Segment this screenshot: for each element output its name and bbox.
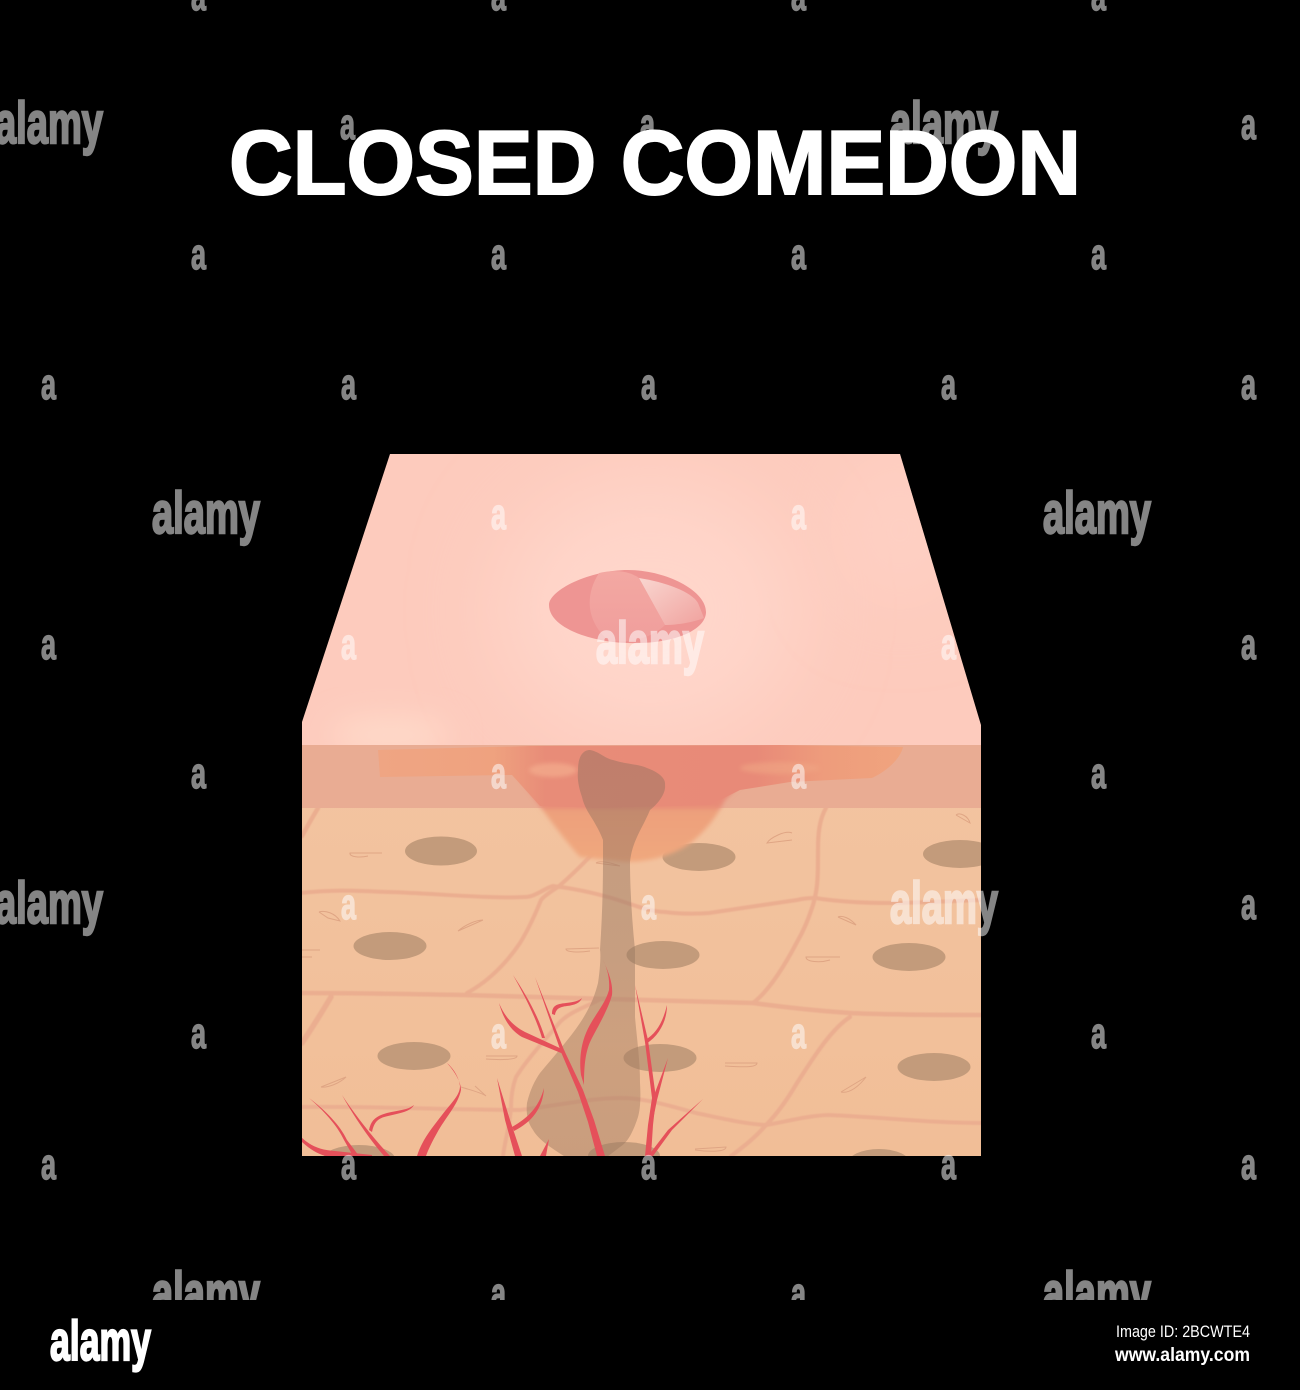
watermark row: y 777: a	[791, 749, 806, 798]
image id: Image ID: 2BCWTE4	[1116, 1322, 1250, 1341]
watermark row: y 260	[191, 244, 1107, 270]
watermark row: y 908: a	[641, 880, 656, 929]
watermark row: y 388: a	[341, 360, 356, 409]
watermark row: y 260: a	[191, 230, 206, 279]
watermark row: y 1297	[152, 1269, 1152, 1300]
watermark row: y 648: a	[41, 620, 56, 669]
watermark row: y 1037: a	[491, 1009, 506, 1058]
skin cross-section	[300, 745, 997, 1177]
watermark row: y 388: a	[941, 360, 956, 409]
sebum orange patch	[378, 745, 903, 808]
watermark row: y 1037: a	[791, 1009, 806, 1058]
watermark row: y 777	[191, 764, 1107, 790]
watermark row: y 648: a	[341, 620, 356, 669]
watermark row: y 388	[41, 374, 1257, 400]
watermark row: y 648	[41, 619, 1257, 676]
comedon follicle	[527, 750, 665, 1160]
watermark row: y 388: a	[1241, 360, 1256, 409]
watermark row: y 908: a	[1241, 880, 1256, 929]
watermark row: y 518: alamy	[152, 481, 260, 546]
closed comedon bump on skin surface	[549, 570, 706, 643]
watermark row: y 260: a	[791, 230, 806, 279]
watermark row: y 518: alamy	[1043, 481, 1151, 546]
blood vessels	[300, 960, 703, 1157]
watermark row: y 128: alamy	[890, 91, 998, 156]
watermark row: y 1168: a	[941, 1140, 956, 1189]
watermark row: y 1037	[191, 1024, 1107, 1050]
watermark row: y 648: alamy	[596, 611, 704, 676]
watermark row: y 1297: alamy	[1043, 1261, 1151, 1326]
watermark row: y 1168: a	[641, 1140, 656, 1189]
cell walls	[300, 808, 981, 1156]
top skin surface	[302, 454, 981, 751]
watermark row: y 648: a	[941, 620, 956, 669]
watermark row: y 777: a	[1091, 749, 1106, 798]
watermark row: y 777: a	[191, 749, 206, 798]
watermark row: y 518: a	[791, 490, 806, 539]
inflammation around follicle	[534, 794, 734, 864]
skin block illustration	[300, 454, 997, 1177]
watermark row: y 1297: a	[491, 1269, 506, 1318]
watermark row: y 1037: a	[191, 1009, 206, 1058]
watermark row: y 1037: a	[1091, 1009, 1106, 1058]
watermark row: y 1168: a	[341, 1140, 356, 1189]
watermark row: y 1168: a	[1241, 1140, 1256, 1189]
watermark row: y 260: a	[491, 230, 506, 279]
watermark row: y 388: a	[641, 360, 656, 409]
watermark row: top edge	[191, 0, 1107, 12]
watermark row: y 908	[0, 879, 1257, 936]
title: CLOSED COMEDON	[229, 113, 1081, 214]
watermark row: y 1168	[41, 1154, 1257, 1180]
watermark row: y 908: a	[341, 880, 356, 929]
watermark row: y 908: alamy	[890, 871, 998, 936]
watermark row: y 128	[0, 99, 1257, 156]
watermark row: y 260: a	[1091, 230, 1106, 279]
logo: alamy: alamy	[50, 1309, 151, 1372]
watermark row: y 1297: a	[791, 1269, 806, 1318]
watermark row: y 518	[152, 489, 1152, 546]
cell nuclei	[323, 836, 997, 1177]
fine cell detail lines	[300, 814, 970, 1151]
watermark row: y 1168: a	[41, 1140, 56, 1189]
watermark row: y 128: a	[1241, 100, 1256, 149]
watermark row: y 1297: alamy	[152, 1261, 260, 1326]
watermark row: y 128: a	[640, 100, 655, 149]
watermark row: y 128: a	[340, 100, 355, 149]
watermark row: y 518: a	[491, 490, 506, 539]
watermark row: y 648: a	[1241, 620, 1256, 669]
watermark row: y 388: a	[41, 360, 56, 409]
epidermis band	[302, 745, 981, 808]
watermark row: y 777: a	[491, 749, 506, 798]
website url: www.alamy.com	[1114, 1345, 1250, 1366]
